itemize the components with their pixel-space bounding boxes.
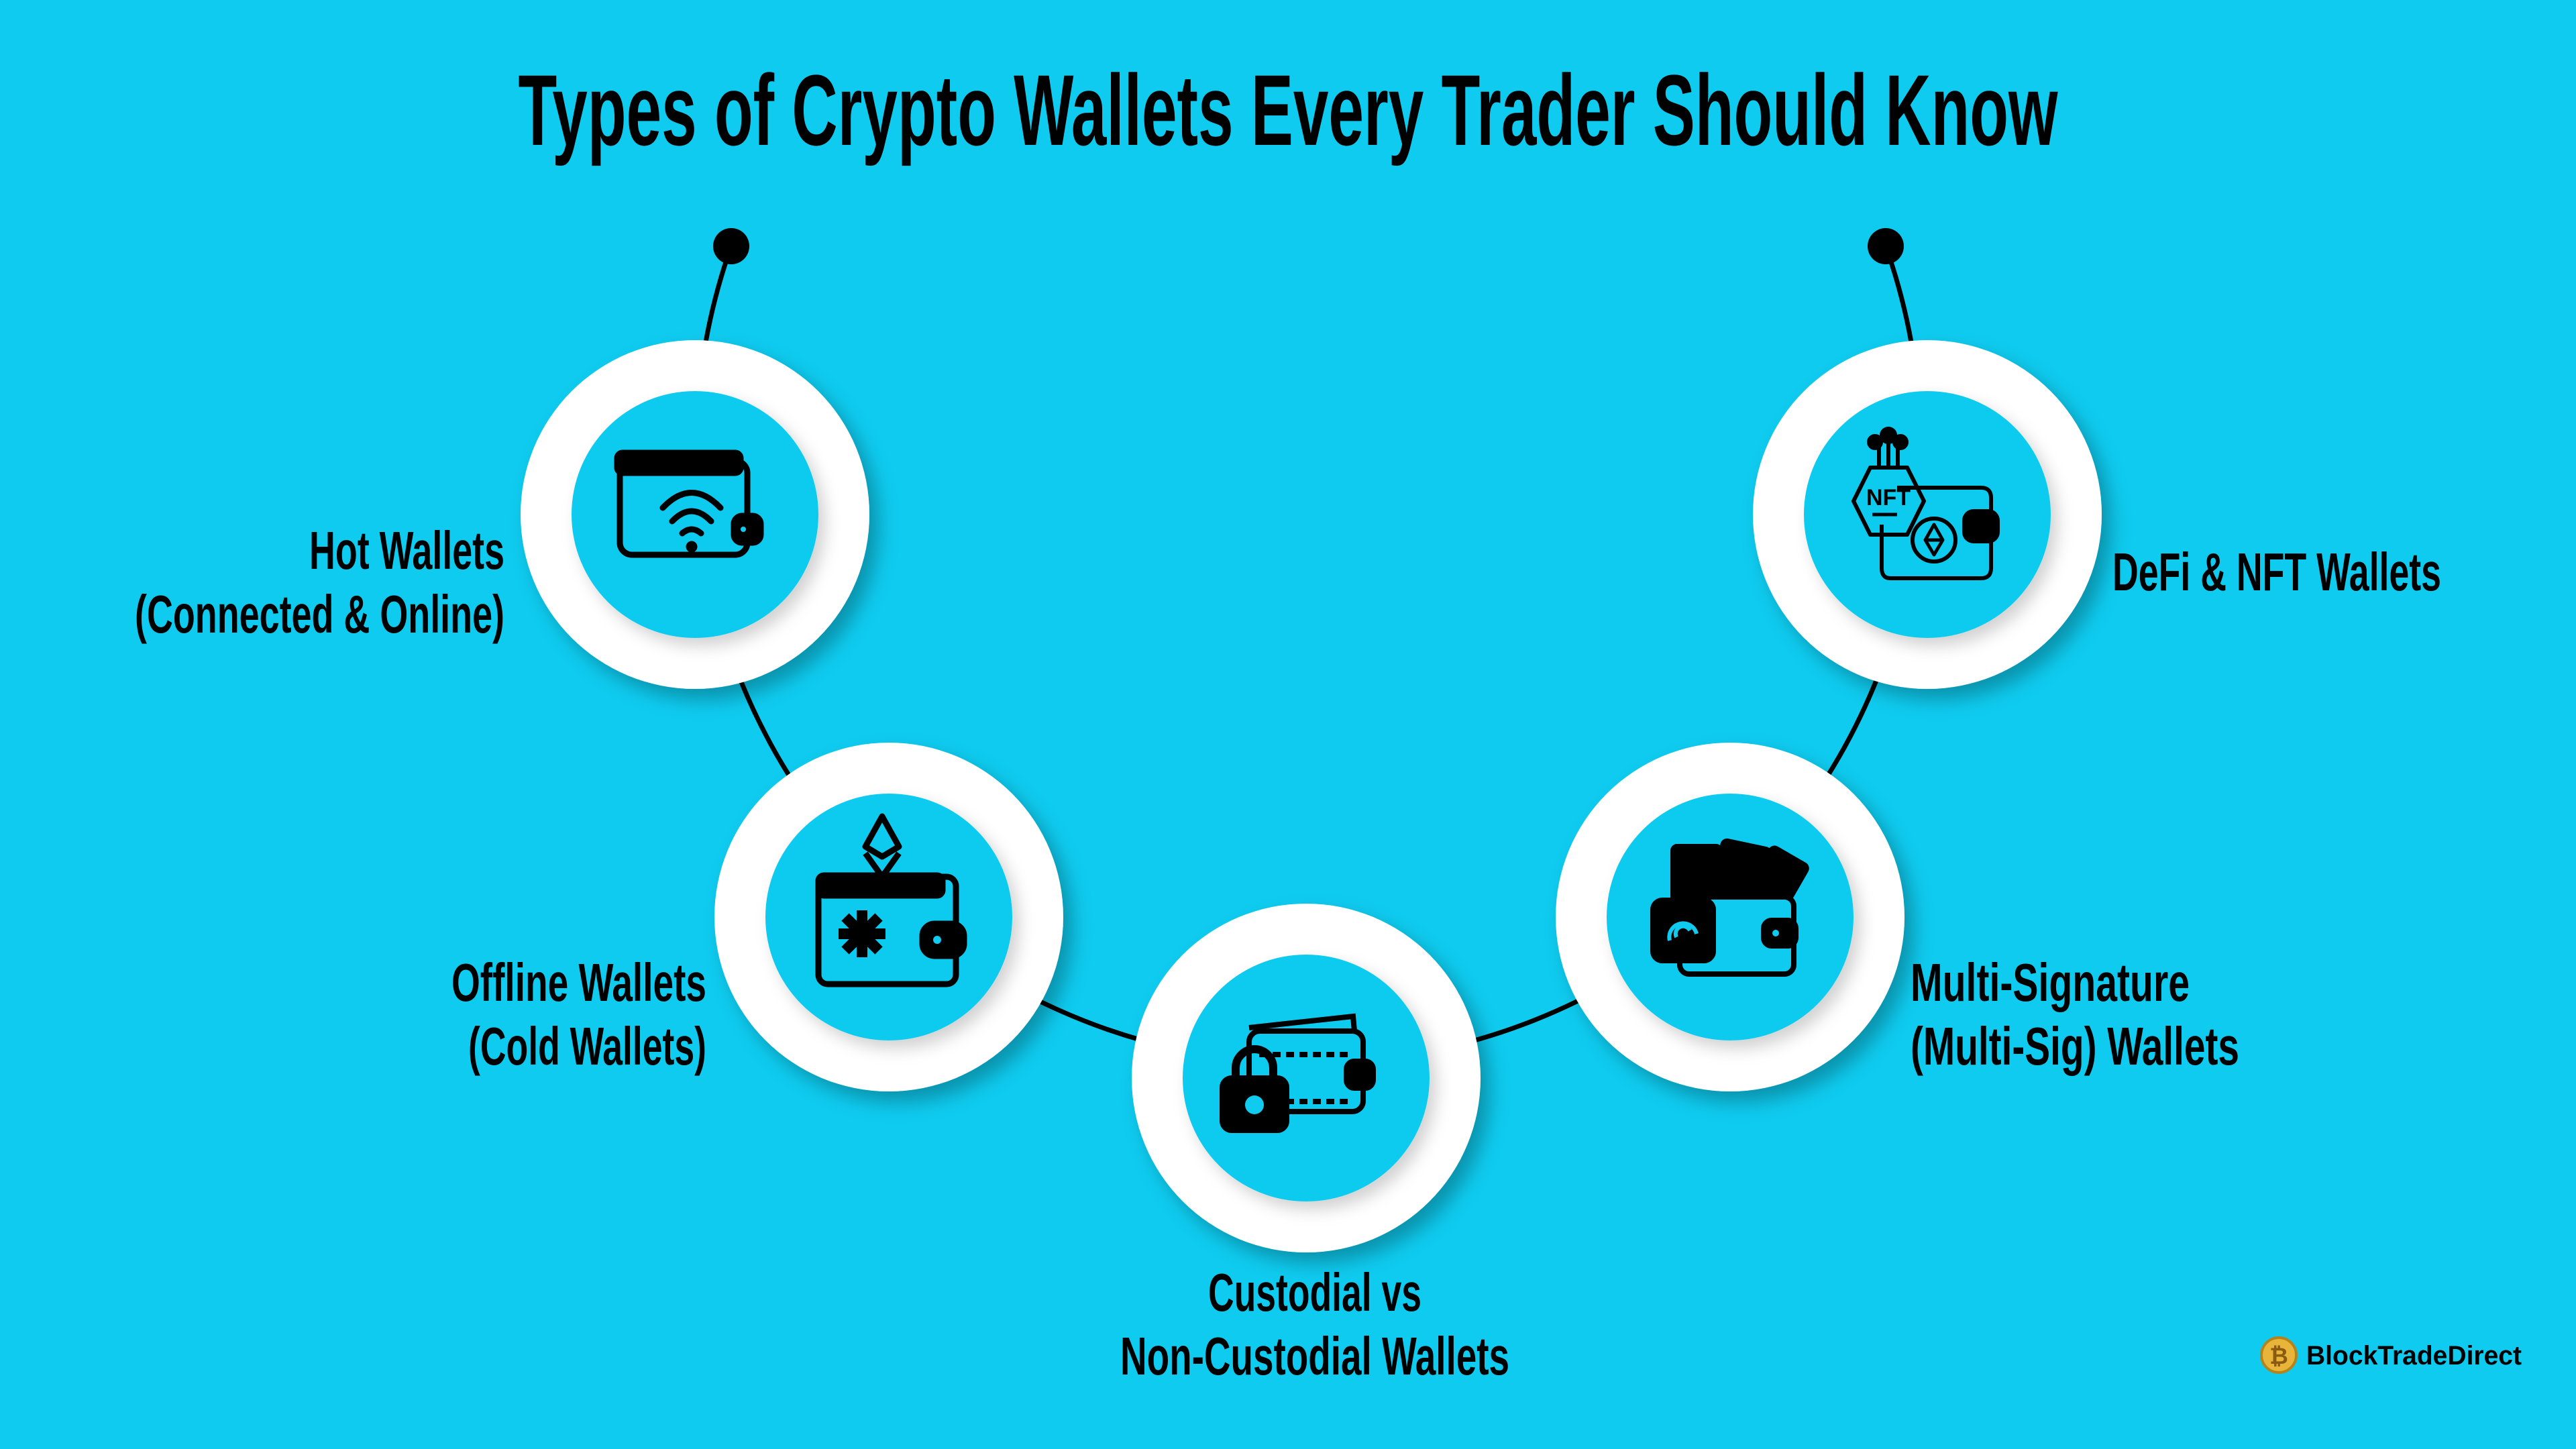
icon: NFT wallet — [1854, 429, 1998, 578]
node: defi and nft — [1753, 340, 2102, 689]
icon: wallet with wifi — [617, 453, 761, 555]
label: custodial: Custodial vs — [1208, 1263, 1421, 1322]
label: hot wallets — [135, 521, 504, 644]
node: offline wallets — [714, 743, 1063, 1091]
icon: cold wallet — [818, 816, 964, 984]
icon: wallet with lock — [1222, 1016, 1373, 1130]
label: multi-sig — [1911, 953, 2239, 1076]
label: custodial — [1120, 1263, 1509, 1386]
node: hot wallets — [521, 340, 869, 689]
label: offline wallets: Offline Wallets — [451, 953, 706, 1012]
label: multi-sig: (Multi-Sig) Wallets — [1911, 1016, 2239, 1076]
label: hot wallets: (Connected & Online) — [135, 584, 504, 644]
label: multi-sig: Multi-Signature — [1911, 953, 2190, 1012]
label: offline wallets — [451, 953, 706, 1076]
logo — [2261, 1338, 2522, 1373]
label: custodial: Non-Custodial Wallets — [1120, 1326, 1509, 1386]
label: hot wallets: Hot Wallets — [309, 521, 504, 580]
label: offline wallets: (Cold Wallets) — [468, 1016, 706, 1076]
logo: BlockTradeDirect — [2306, 1341, 2522, 1371]
icon: wallet with cards and fingerprint — [1653, 841, 1808, 974]
arc connector — [696, 228, 1921, 1063]
node: defi and nft: NFT — [1866, 485, 1911, 511]
node: custodial vs non-custodial — [1132, 904, 1481, 1252]
node: multi-signature — [1556, 743, 1904, 1091]
logo: ₿ — [2269, 1344, 2288, 1369]
